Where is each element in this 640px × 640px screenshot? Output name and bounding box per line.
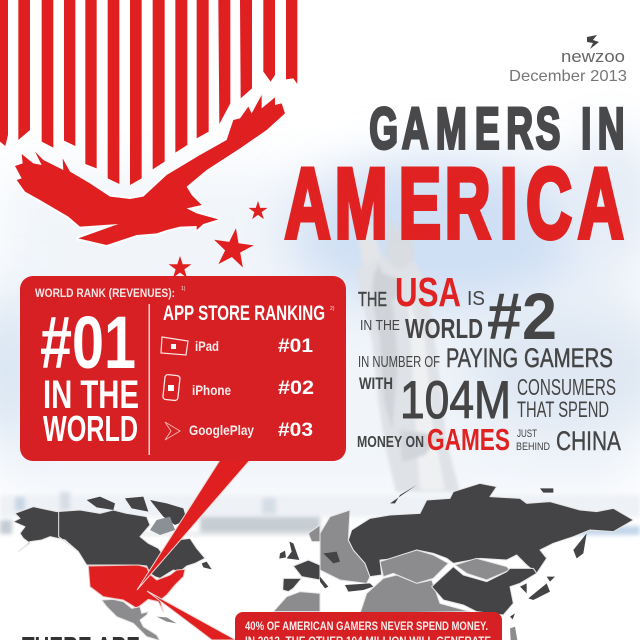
icon: google play [165,422,180,440]
newzoo logo [561,35,625,66]
statistics text block: JUST [517,428,537,440]
statistics text block: BEHIND [516,441,550,453]
stars [169,201,268,278]
statistics text block: PAYING [446,343,518,373]
red flag stripes [0,0,297,185]
world map [13,483,633,640]
statistics text block: CHINA [556,426,621,456]
statistics text block: WORLD [405,313,483,344]
statistics text block: GAMES [427,422,510,457]
statistics text block: #2 [487,279,557,353]
rank caption: WORLD RANK (REVENUES): [35,286,175,300]
map: north america [13,497,212,640]
rank label line 1: IN THE [43,373,139,417]
rank label line 2: WORLD [43,408,138,449]
ipad rank: #01 [278,336,313,357]
title [285,97,625,259]
statistics text block [357,269,621,457]
callout: world rank panel [20,276,346,461]
date: December 2013 [509,68,627,85]
icon: newzoo mark [587,35,599,49]
statistics text block: IN NUMBER OF [358,354,440,371]
statistics text block: THE [358,289,387,311]
footnote 1: 1) [181,286,186,292]
statistics text block: IS [467,288,485,310]
note line 1: 40% OF AMERICAN GAMERS NEVER SPEND MONEY. [245,619,488,633]
map: europe west [273,525,320,612]
statue of liberty [355,212,460,492]
google play rank: #03 [278,420,313,441]
statistics text block: WITH [359,374,393,393]
brand name: newzoo [561,47,625,66]
rank number: #01 [40,301,136,384]
eagle [15,95,285,245]
icon: iphone [163,374,180,401]
title line 1: GAMERS IN [369,97,625,162]
statistics text block: GAMERS [524,343,613,373]
callout: spending note [235,612,502,640]
icon: ipad [161,337,188,355]
statistics text block: USA [395,269,461,315]
divider [148,304,150,455]
callout pointer to USA [137,460,250,590]
city skyline strip [0,492,640,535]
statistics text block: 104M [400,371,511,430]
app store heading: APP STORE RANKING [163,302,325,325]
title line 2: AMERICA [285,148,624,259]
footnote 2: 2) [330,306,335,312]
iphone label: iPhone [192,382,231,398]
map: eurasia [320,483,633,640]
google play label: GooglePlay [189,422,254,438]
statistics text block: IN THE [360,317,400,334]
statistics text block: MONEY ON [357,434,424,451]
iphone rank: #02 [278,378,314,399]
sky background [0,130,640,640]
ipad label: iPad [195,338,219,354]
callout pointer to spending note [147,591,236,640]
